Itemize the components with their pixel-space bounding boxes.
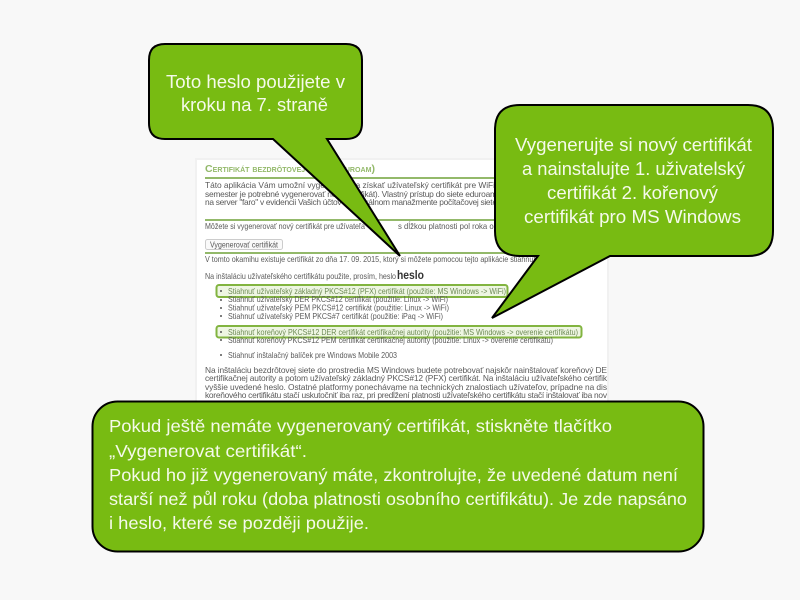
callout: instructions: „Vygenerovat certifikát“. <box>109 441 307 461</box>
callout: instructions: Pokud ho již vygenerovaný máte, zkontrolujte, že uvedené datum není <box>109 465 678 485</box>
callout: instructions: Pokud ještě nemáte vygenerovaný certifikát, stiskněte tlačítko <box>109 416 612 436</box>
text block: installation notes: Na inštaláciu bezdrôtovej siete do prostredia MS Windows budete potrebovať najskôr nainštalovať koreňový DE <box>205 365 607 375</box>
highlight: root certificate <box>216 326 582 338</box>
callout: generate and install certificates: Vygenerujte si nový certifikát <box>515 135 752 155</box>
callout: password used on page 7: Toto heslo použijete v <box>166 72 345 92</box>
button: generate certificate: Vygenerovať certifikát <box>210 240 279 250</box>
list: certificate downloads: Stiahnuť užívateľský DER PKCS#12 certifikát (použitie: Linux -> WiFi) <box>228 294 448 304</box>
list: certificate downloads: Stiahnuť inštalačný balíček pre Windows Mobile 2003 <box>228 350 397 360</box>
list: certificate downloads: Stiahnuť koreňový PKCS#12 DER certifikát certifikačnej autority (použitie: MS Windows -> overenie certifikátu) <box>228 327 578 337</box>
list: certificate downloads: Stiahnuť užívateľský základný PKCS#12 (PFX) certifikát (použitie: MS Windows -> WiFi) <box>228 286 506 296</box>
panel: certificate page screenshot <box>195 158 609 412</box>
callout: generate and install certificates: certifikát 2. kořenový <box>547 183 718 203</box>
text: generate new certificate: s dĺžkou platnosti pol roka od <box>398 220 498 231</box>
callout: generate and install certificates <box>492 105 773 318</box>
text: password note: Na inštaláciu užívateľského certifikátu použite, prosím, heslo <box>205 271 396 281</box>
list: certificate downloads: Stiahnuť užívateľský PEM PKCS#7 certifikát (použitie: iPaq -> WiFi) <box>228 311 443 321</box>
callout: password used on page 7: kroku na 7. straně <box>181 95 328 115</box>
text: generate new certificate: Môžete si vygenerovať nový certifikát pre užívateľa <box>205 221 365 231</box>
text: existing certificate: V tomto okamihu existuje certifikát zo dňa 17. 09. 2015, ktorý si môžete pomocou tejto aplikácie stiahnuť. <box>205 254 538 264</box>
list: certificate downloads: Stiahnuť užívateľský PEM PKCS#12 certifikát (použitie: Linux -> WiFi) <box>228 302 449 312</box>
list: certificate downloads <box>220 286 578 360</box>
highlight: user certificate <box>216 285 508 297</box>
text: password note: heslo <box>397 270 424 282</box>
text block: installation notes <box>205 365 608 400</box>
callout: instructions: starší než půl roku (doba platnosti osobního certifikátu). Je zde napsáno <box>109 489 687 509</box>
text block: installation notes: koreňového certifikátu stačí uskutočniť iba raz, pri predĺžení platnosti užívateľského certifikátu stačí inštalovať iba nov <box>205 389 608 400</box>
callout: instructions <box>92 402 704 552</box>
callout: generate and install certificates: certifikát pro MS Windows <box>524 207 741 227</box>
list: certificate downloads: Stiahnuť koreňový PKCS#12 PEM certifikát certifikačnej autority (použitie: Linux -> overenie certifikátu) <box>228 335 553 345</box>
text block: introduction: semester je potrebné vygenerovať nový certifikát). Vlastný prístup do siete eduroam <box>205 189 497 199</box>
text block: introduction <box>205 180 497 207</box>
text block: introduction: Táto aplikácia Vám umožní vygenerovať a získať užívateľský certifikát pre WiFi <box>205 180 495 190</box>
text block: installation notes: vyššie uvedené heslo. Ostatné platformy ponechávame na technických znalostiach užívateľov, prípadne na dis <box>205 382 607 392</box>
callout: generate and install certificates: a nainstalujte 1. uživatelský <box>522 159 745 179</box>
callout: instructions: i heslo, které se později použije. <box>109 513 369 533</box>
text block: installation notes: certifikačnej autority a potom užívateľský základný PKCS#12 (PFX) certifikát. Na inštaláciu užívateľského certifik <box>205 373 608 383</box>
text block: introduction: na server "faro" v evidencii Vašich účtov v Centrálnom manažmente počítačovej siete <box>205 197 497 207</box>
text: generate new certificate <box>205 220 498 231</box>
callout: password used on page 7 <box>149 44 400 256</box>
heading: certificate page: Certifikát bezdrôtovej siete (eduroam) <box>205 163 375 175</box>
